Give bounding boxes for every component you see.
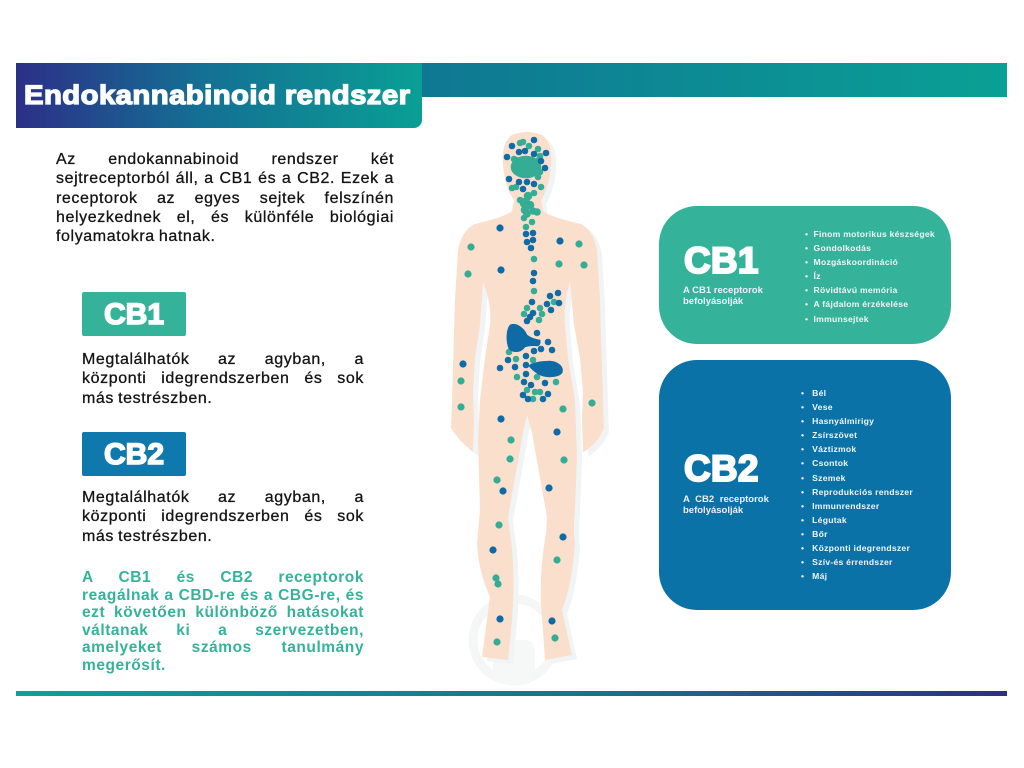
CB1 list: • Íz — [805, 271, 821, 281]
CB2 list: • Szemek — [801, 473, 846, 483]
CB2 subtitle: befolyásolják — [683, 505, 743, 516]
blue receptors — [460, 137, 566, 624]
CB2 list: • Máj — [801, 571, 827, 581]
green conclusion text: amelyeket számos tanulmány — [82, 639, 364, 656]
CB2 description: Megtalálhatók az agyban, a — [82, 489, 364, 506]
intro text: Az endokannabinoid rendszer két — [56, 151, 394, 168]
CB1 list: • A fájdalom érzékelése — [805, 299, 908, 309]
green conclusion text — [82, 569, 364, 674]
CB1 subtitle: befolyásolják — [683, 296, 743, 307]
CB1 list: • Finom motorikus készségek — [805, 229, 935, 239]
body figure with receptors — [451, 132, 609, 686]
CB2 list: • Csontok — [801, 458, 848, 468]
bottom gradient bar — [16, 691, 1007, 696]
CB2 list — [801, 388, 913, 581]
CB2 list: • Központi idegrendszer — [801, 543, 910, 553]
CB2 list: • Zsírszövet — [801, 430, 857, 440]
top banner bar — [16, 63, 1007, 97]
CB1 description: más testrészben. — [82, 390, 212, 407]
panel: CB1 — [659, 206, 951, 344]
badge: CB2 — [82, 432, 186, 476]
badge: CB1 — [82, 292, 186, 336]
CB1 description: Megtalálhatók az agyban, a — [82, 351, 364, 368]
CB1 description — [82, 351, 364, 407]
CB2 description: központi idegrendszerben és sok — [82, 508, 364, 525]
CB1 list: • Gondolkodás — [805, 243, 871, 253]
intro text: receptorok az egyes sejtek felszínén — [56, 190, 394, 207]
body silhouette — [451, 132, 604, 660]
CB1 heading: CB1 — [684, 240, 759, 281]
intro text: sejtreceptorból áll, a CB1 és a CB2. Ezek a — [56, 170, 394, 187]
CB2 list: • Váztizmok — [801, 444, 856, 454]
CB2 list: • Hasnyálmirigy — [801, 416, 874, 426]
CB2 subtitle: A CB2 receptorok — [683, 494, 769, 505]
CB2 description — [82, 489, 364, 545]
intro text: folyamatokra hatnak. — [56, 228, 216, 245]
CB2 list: • Bőr — [801, 529, 828, 539]
CB1 description: központi idegrendszerben és sok — [82, 370, 364, 387]
CB2 heading: CB2 — [684, 448, 759, 489]
green conclusion text: A CB1 és CB2 receptorok — [82, 569, 364, 586]
panel: CB2 — [659, 360, 951, 610]
green receptors — [458, 139, 595, 645]
CB2 description: más testrészben. — [82, 528, 212, 545]
green conclusion text: megerősít. — [82, 656, 166, 674]
title box — [16, 63, 422, 128]
CB2 list: • Immunrendszer — [801, 501, 879, 511]
watermark logo — [473, 599, 555, 684]
CB2 subtitle — [683, 494, 769, 516]
CB2 list: • Légutak — [801, 515, 847, 525]
CB1 subtitle — [683, 285, 763, 307]
green conclusion text: váltanak ki a szervezetben, — [82, 622, 364, 638]
intro text: helyezkednek el, és különféle biológiai — [56, 209, 394, 226]
badge: CB2: CB2 — [104, 438, 164, 471]
green conclusion text: reagálnak a CBD-re és a CBG-re, és — [82, 586, 364, 604]
CB2 list: • Reprodukciós rendszer — [801, 487, 913, 497]
green conclusion text: ezt követően különböző hatásokat — [82, 604, 364, 621]
CB2 list: • Bél — [801, 388, 826, 398]
CB1 list: • Immunsejtek — [805, 314, 869, 324]
CB1 subtitle: A CB1 receptorok — [683, 285, 763, 296]
CB1 list: • Mozgáskoordináció — [805, 257, 898, 267]
CB2 list: • Vese — [801, 402, 833, 412]
CB2 list: • Szív-és érrendszer — [801, 557, 893, 567]
badge: CB1: CB1 — [104, 298, 164, 331]
intro text — [56, 151, 394, 245]
CB1 list: • Rövidtávú memória — [805, 285, 898, 295]
body shadow — [456, 136, 609, 664]
CB1 list — [805, 229, 935, 324]
title: Endokannabinoid rendszer — [24, 80, 410, 110]
